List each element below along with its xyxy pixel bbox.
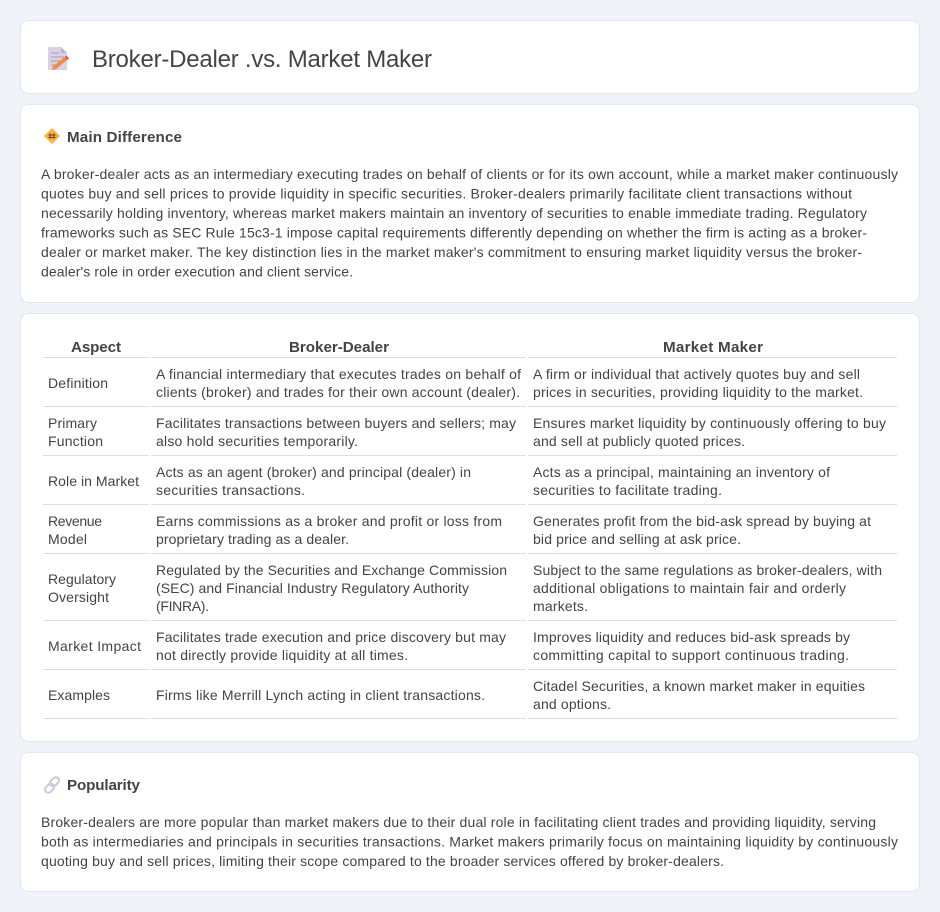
- table row: examples: [43, 678, 897, 718]
- table row: regulatory oversight: Oversight: [48, 589, 109, 605]
- table row: examples: and options.: [533, 696, 611, 712]
- table row: role in market: Acts as an agent (broker) and principal (dealer) in: [156, 464, 471, 480]
- text block: main difference paragraph: dealer's role in order execution and client service.: [41, 264, 353, 280]
- table row: role in market: Role in Market: [48, 473, 139, 489]
- table row: revenue model: Generates profit from the bid-ask spread by buying at: [533, 513, 871, 529]
- table row: role in market: [43, 464, 897, 504]
- icon: chain link: [44, 776, 60, 794]
- table row: definition: [43, 366, 897, 406]
- table row: regulatory oversight: Regulated by the Securities and Exchange Commission: [156, 562, 507, 578]
- table row: regulatory oversight: Regulatory: [48, 571, 116, 587]
- table row: examples: Firms like Merrill Lynch acting in client transactions.: [156, 687, 485, 703]
- table row: primary function: Facilitates transactions between buyers and sellers; may: [156, 415, 516, 431]
- table row: role in market: Acts as a principal, maintaining an inventory of: [533, 464, 830, 480]
- table row: definition: A financial intermediary that executes trades on behalf of: [156, 366, 521, 382]
- table row: revenue model: Revenue: [48, 513, 102, 529]
- heading: main difference: Main Difference: [67, 129, 182, 146]
- table row: revenue model: proprietary trading as a dealer.: [156, 531, 349, 547]
- table row: definition: clients (broker) and trades for their own account (dealer).: [156, 384, 520, 400]
- table row: primary function: Function: [48, 433, 103, 449]
- text block: main difference paragraph: quotes buy and sell prices to provide liquidity in specific securities. Broker-dealers primarily facilitate client transactions without: [41, 186, 852, 202]
- table row: market impact: Facilitates trade execution and price discovery but may: [156, 629, 506, 645]
- text block: main difference paragraph: necessarily holding inventory, whereas market makers maintain an inventory of securities to enable immediate trading. Regulatory: [41, 205, 867, 221]
- table row: definition: A firm or individual that actively quotes buy and sell: [533, 366, 860, 382]
- header panel: [20, 20, 920, 94]
- heading: popularity: Popularity: [67, 777, 141, 794]
- table row: examples: Citadel Securities, a known market maker in equities: [533, 678, 865, 694]
- table row: regulatory oversight: [43, 562, 897, 620]
- table row: primary function: Ensures market liquidity by continuously offering to buy: [533, 415, 886, 431]
- table row: revenue model: Model: [48, 531, 87, 547]
- table row: regulatory oversight: markets.: [533, 598, 588, 614]
- text block: main difference paragraph: dealer or market maker. The key distinction lies in the market maker's commitment to ensuring market liquidity versus the broker-: [41, 244, 862, 260]
- icon: warning diamond: [44, 128, 60, 144]
- panel: popularity: [20, 752, 920, 892]
- icon: document with pencil: [48, 47, 69, 70]
- table row: examples: Examples: [48, 687, 110, 703]
- table row: regulatory oversight: additional obligations to maintain fair and orderly: [533, 580, 846, 596]
- table row: primary function: and sell at publicly quoted prices.: [533, 433, 745, 449]
- table row: role in market: securities transactions.: [156, 482, 305, 498]
- table row: regulatory oversight: (SEC) and Financial Industry Regulatory Authority: [156, 580, 469, 596]
- text block: popularity paragraph: both as intermediaries and principals in securities transactions. Market makers primarily focus on maintaining liquidity by continuously: [41, 834, 898, 850]
- table row: market impact: Improves liquidity and reduces bid-ask spreads by: [533, 629, 850, 645]
- table row: primary function: Primary: [48, 415, 97, 431]
- table row: definition: prices in securities, providing liquidity to the market.: [533, 384, 863, 400]
- table header row: [43, 339, 897, 358]
- panel: comparison table: [20, 314, 920, 742]
- table row: revenue model: bid price and selling at ask price.: [533, 531, 741, 547]
- text block: popularity paragraph: [41, 814, 898, 869]
- text block: main difference paragraph: [41, 166, 898, 280]
- table header row: Market Maker: [663, 339, 763, 356]
- panel: main difference: [20, 104, 920, 302]
- text block: main difference paragraph: A broker-dealer acts as an intermediary executing trades on behalf of clients or for its own account, while a market maker continuously: [41, 166, 898, 182]
- table row: regulatory oversight: (FINRA).: [156, 598, 209, 614]
- table row: role in market: securities to facilitate trading.: [533, 482, 722, 498]
- text block: popularity paragraph: Broker-dealers are more popular than market makers due to their dual role in facilitating client trades and providing liquidity, serving: [41, 814, 876, 830]
- text block: main difference paragraph: frameworks such as SEC Rule 15c3-1 impose capital requirements differently depending on whether the firm is acting as a broker-: [41, 224, 867, 240]
- text block: popularity paragraph: quoting buy and sell prices, limiting their scope compared to the broader services offered by broker-dealers.: [41, 853, 724, 869]
- title: Broker-Dealer .vs. Market Maker: [92, 46, 432, 73]
- table row: market impact: not directly provide liquidity at all times.: [156, 647, 408, 663]
- table row: revenue model: Earns commissions as a broker and profit or loss from: [156, 513, 502, 529]
- table row: market impact: [43, 629, 897, 670]
- table header row: Aspect: [71, 339, 121, 356]
- table row: primary function: [43, 415, 897, 456]
- table row: market impact: committing capital to support continuous trading.: [533, 647, 849, 663]
- table row: regulatory oversight: Subject to the same regulations as broker-dealers, with: [533, 562, 882, 578]
- table row: definition: Definition: [48, 375, 108, 391]
- table header row: Broker-Dealer: [289, 339, 389, 356]
- table row: revenue model: [43, 513, 897, 554]
- table row: market impact: Market Impact: [48, 638, 141, 654]
- table row: primary function: also hold securities temporarily.: [156, 433, 358, 449]
